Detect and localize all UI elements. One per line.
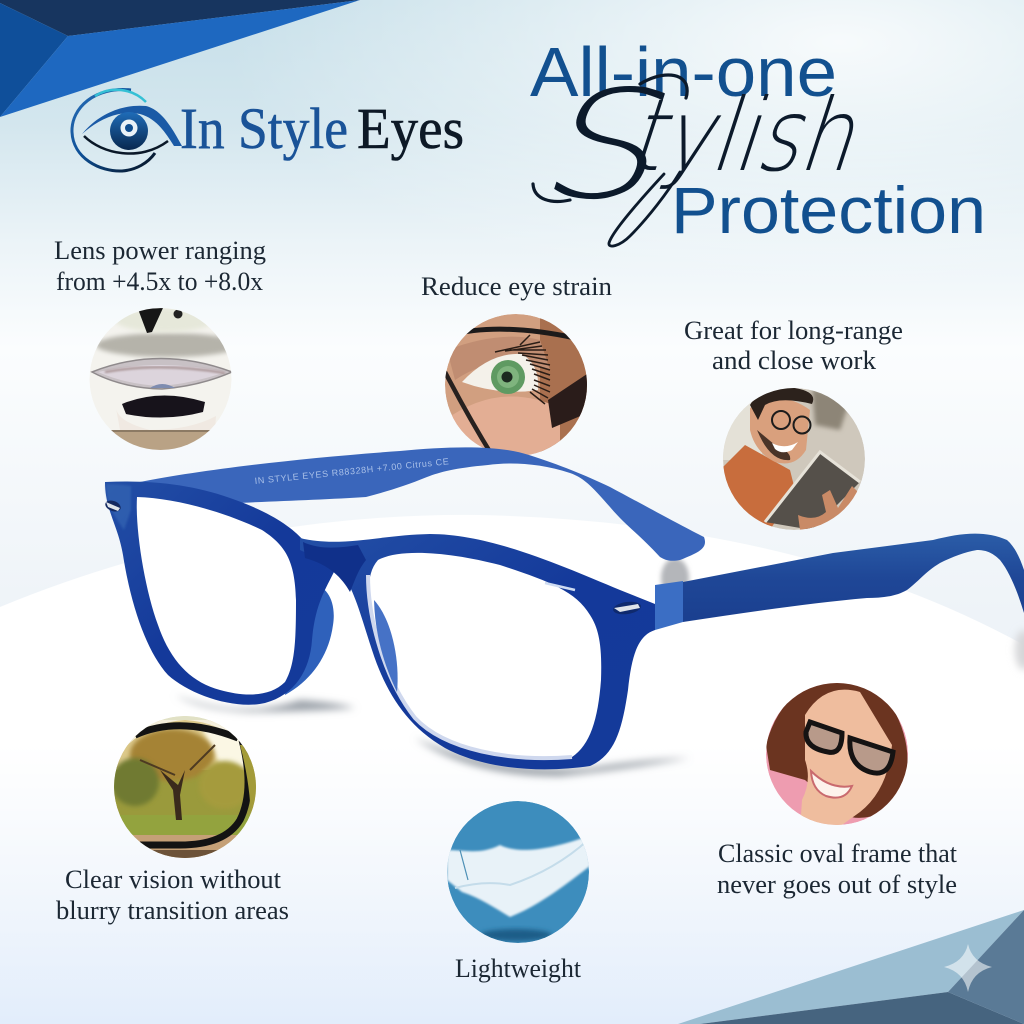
feature label: long-range and close work (684, 316, 903, 375)
bridge shading (303, 542, 366, 592)
feature label: lens power: Lens power ranging (54, 236, 266, 265)
left front frame (105, 482, 335, 705)
feature label: lightweight: Lightweight (455, 954, 582, 983)
photo circle: lens (90, 308, 232, 450)
feature label: long-range and close work: and close work (712, 346, 876, 375)
hinge block (655, 581, 683, 630)
photo circle: man reading tablet (722, 388, 865, 533)
right lens bevel (368, 575, 572, 758)
top-left corner polygons (0, 0, 360, 117)
feature label: classic oval frame: never goes out of style (717, 870, 957, 899)
feature label: classic oval frame (717, 839, 958, 899)
bridge and right front frame (300, 534, 655, 769)
icon: eye mark (72, 90, 182, 171)
ground shadows (175, 630, 1024, 776)
feature label: clear vision (56, 865, 289, 925)
near temple arm (683, 534, 1024, 622)
far temple arm (140, 447, 705, 561)
feature label: lens power: from +4.5x to +8.0x (56, 267, 263, 296)
feature label: lens power (54, 236, 266, 296)
heading: All-in-one: All-in-one (530, 33, 837, 111)
icon: sparkle star (944, 944, 992, 992)
gloss highlights (545, 583, 575, 590)
product: blue glasses (104, 447, 1024, 776)
nose pad seen through lens (374, 600, 398, 692)
rivets (104, 499, 642, 616)
photo circle: feather (447, 801, 590, 943)
script word: Stylish: tylish (619, 78, 879, 194)
right lens (369, 553, 601, 758)
photo circle: smiling woman (766, 681, 908, 830)
logo (72, 90, 464, 171)
bottom-right corner polygons (678, 910, 1024, 1024)
right nose pad (372, 610, 397, 695)
photo circle: clear vision landscape (114, 716, 256, 858)
feature label: reduce eye strain: Reduce eye strain (421, 272, 612, 301)
left corner highlight (106, 484, 131, 530)
script word: Stylish (523, 59, 879, 246)
title (523, 33, 986, 247)
left lens (137, 497, 296, 695)
heading: Protection: Protection (671, 173, 986, 247)
photo circle: eye close-up (445, 310, 590, 460)
temple drop shadow (661, 558, 689, 598)
feature label: clear vision: blurry transition areas (56, 896, 289, 925)
left nose pad (285, 585, 334, 695)
temple imprint: IN STYLE EYES R88328H +7.00 Citrus CE (254, 456, 450, 486)
feature label: classic oval frame: Classic oval frame that (718, 839, 958, 868)
feature label: long-range and close work: Great for long-range (684, 316, 903, 345)
feature label: clear vision: Clear vision without (65, 865, 282, 894)
logo wordmark: In Style (180, 96, 348, 161)
logo: Eyes (357, 96, 464, 161)
script word: Stylish: S (523, 59, 695, 233)
